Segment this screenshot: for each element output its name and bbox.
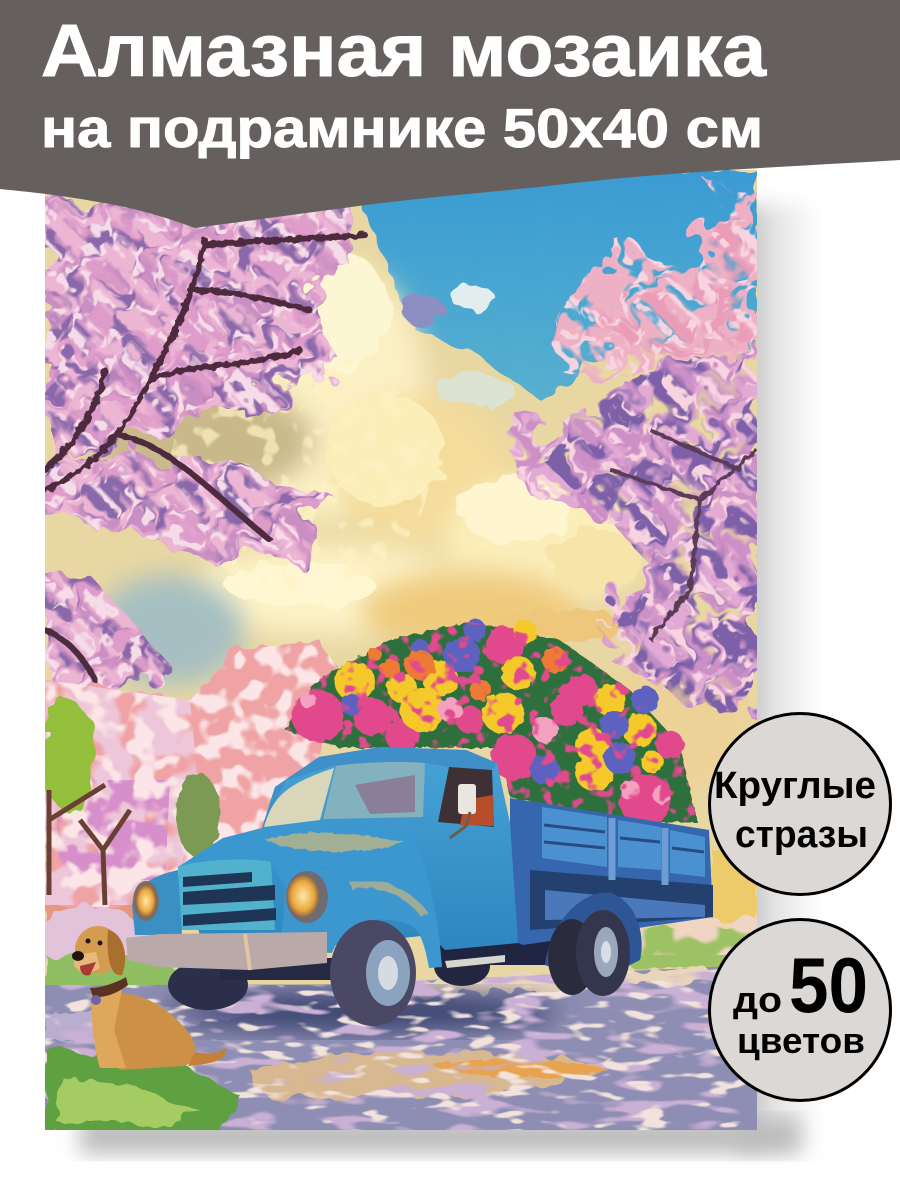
badge: up to 50 colours: цветов [737,1020,865,1061]
canvas drop shadow [80,205,820,1154]
road with fallen petals [45,965,757,1130]
left tree branches [45,235,365,680]
running board [445,955,505,968]
title [41,9,767,159]
badge: up to 50 colours: до [733,979,782,1020]
rear wheel and arch [545,892,642,996]
yellow flowers [335,620,663,791]
cab roof [262,747,497,828]
side window and mirror [438,767,494,838]
badge: round rhinestones: Круглые [714,765,876,807]
painting: truck with flowers under blossoming trees [35,170,757,1135]
grass in foreground [45,1050,240,1135]
badge: round rhinestones: стразы [735,814,868,856]
violet flowers [341,619,659,785]
pink hydrangeas [292,626,684,826]
grille [178,860,276,930]
right blossom tree [500,180,757,715]
windshield [264,762,425,827]
dog [72,926,226,1070]
right tree branches [610,430,757,640]
subtitle: на подрамнике 50х40 см [41,97,763,159]
badge: round rhinestones [710,714,890,894]
front wheel [330,920,416,1026]
badge: up to 50 colours: 50 [789,941,868,1029]
badge: up to 50 colours [710,920,890,1100]
light accents [300,692,671,804]
title: Алмазная мозаика [41,9,767,92]
truck bed [510,798,713,945]
background pink trees and park [35,640,757,1005]
truck body silhouette [178,747,518,950]
orange flowers [368,647,568,701]
header banner [0,0,900,228]
left wheel and undercarriage [168,941,550,1010]
flower mound in the truck bed [285,619,697,826]
left blossom tree [45,195,350,700]
bumper [126,932,327,970]
front fender [282,880,442,968]
left fender and headlight [132,870,182,935]
painting background sky and clouds [45,170,757,985]
blue truck [126,747,713,1026]
hood [178,837,432,896]
right headlight [286,871,328,923]
